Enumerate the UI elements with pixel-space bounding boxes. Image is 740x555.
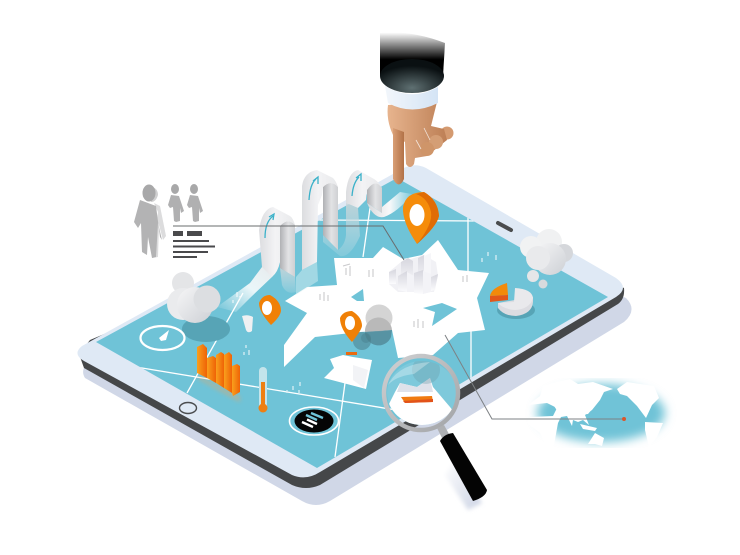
pin large <box>403 192 439 244</box>
city: base mass <box>389 255 438 292</box>
map roads <box>136 208 477 457</box>
tablet: dark edge <box>79 200 624 488</box>
ribbon: arch 3 grey <box>367 183 382 213</box>
bars reflection <box>197 375 240 402</box>
cloud right <box>520 229 573 288</box>
icon: small person 1 <box>168 184 184 222</box>
icon: thermometer <box>258 367 268 412</box>
ribbon: base on tablet right <box>367 192 412 217</box>
map marker dot <box>622 417 626 421</box>
ribbon: translucent U 2 <box>323 203 360 256</box>
magnifying glass <box>384 356 487 510</box>
ribbon: arch 2 white <box>302 170 338 270</box>
ribbon: arch 1 white <box>259 207 295 277</box>
infographic: isometric tablet map <box>78 34 672 510</box>
lens ring <box>384 356 458 430</box>
hand palm <box>388 102 447 167</box>
city buildings <box>233 252 496 393</box>
globe glow <box>537 384 665 442</box>
pie chart <box>490 283 535 319</box>
icon: cup <box>242 315 253 332</box>
cloud left <box>167 272 230 342</box>
icon: people group <box>134 184 203 258</box>
icon: small person 2 <box>187 184 203 222</box>
text placeholder lines <box>173 231 215 258</box>
leader line: people to city <box>173 226 404 260</box>
lens: magnified land <box>389 378 452 425</box>
ribbon: arch 3 white <box>346 170 382 208</box>
handle <box>440 433 487 501</box>
tablet <box>77 165 632 505</box>
ribbon arrows <box>265 174 361 238</box>
world map inset <box>527 379 665 447</box>
lens <box>387 361 457 425</box>
island fold <box>353 365 368 388</box>
handle shadow <box>445 460 482 510</box>
lens: glare <box>388 362 430 385</box>
pointing finger <box>393 128 404 184</box>
North and central America <box>617 382 659 418</box>
Australia <box>588 433 604 446</box>
icon: big person <box>134 184 166 258</box>
ribbon: base on tablet left <box>217 262 280 312</box>
finger creases <box>416 128 430 149</box>
land: small island <box>324 355 372 389</box>
lake: left <box>351 289 364 301</box>
tablet: speaker slot <box>498 223 511 230</box>
ribbon: arch 1 grey <box>280 221 295 277</box>
land: main star <box>284 240 489 367</box>
continents <box>527 379 663 447</box>
lens: circle shadow <box>412 361 440 384</box>
tablet: ground shadow <box>83 200 632 505</box>
cloud shadow <box>182 316 230 342</box>
Eurasia and Africa <box>527 379 613 447</box>
ribbon: translucent U 1 <box>280 268 296 293</box>
overlapping data circles <box>353 304 392 350</box>
tiny trees on land <box>320 264 467 328</box>
lake: right <box>423 303 457 326</box>
curled finger 3 (thumb tip) <box>440 126 454 140</box>
pie shadow <box>497 301 535 319</box>
icon: gauge <box>140 326 184 350</box>
pin middle <box>340 311 362 355</box>
ribbon arches <box>217 170 412 312</box>
pin small left <box>259 295 281 325</box>
sleeve <box>380 32 445 76</box>
bar chart <box>197 344 240 402</box>
tablet: home button <box>180 402 196 414</box>
sleeve opening <box>380 59 444 93</box>
ribbon: arch 2 grey <box>323 183 338 250</box>
tiny trees on screen <box>233 252 496 393</box>
lens: orange band <box>401 396 433 403</box>
Asian islands <box>580 424 597 431</box>
tablet: light body <box>77 165 623 477</box>
world map land <box>284 240 489 389</box>
curled fingers <box>429 135 443 149</box>
hand pointing <box>380 32 454 184</box>
leader line: map to world <box>445 335 622 419</box>
South America <box>645 422 663 447</box>
handle neck <box>437 425 449 438</box>
tablet: screen <box>96 178 608 468</box>
icon: data badge <box>290 407 338 435</box>
Eurasia core <box>545 388 603 416</box>
cuff <box>385 86 438 110</box>
